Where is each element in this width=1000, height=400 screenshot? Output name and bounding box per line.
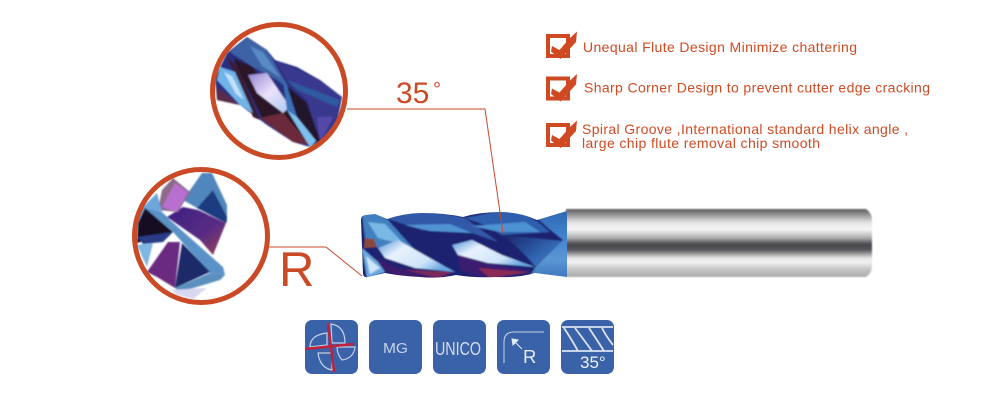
icon: MG: MG xyxy=(383,340,408,357)
feature 3: spiral groove xyxy=(548,120,908,151)
text: Unequal Flute Design Minimize chattering xyxy=(583,39,857,55)
icon: 35 degree helix: 35° xyxy=(580,353,606,372)
label: degree sign: ° xyxy=(433,79,441,101)
icon row: tool properties xyxy=(305,320,614,374)
text line 2: large chip flute removal chip smooth xyxy=(582,135,820,151)
zoom circle: flute detail xyxy=(212,24,346,158)
icon: 35 degree helix xyxy=(561,320,614,374)
fluted section xyxy=(361,211,567,278)
callout line: R corner xyxy=(269,247,362,276)
label: 35 degrees: 35 xyxy=(396,77,429,110)
label: R: R xyxy=(279,243,314,297)
feature 2: sharp corner xyxy=(548,74,930,102)
icon: four flute cross xyxy=(305,320,358,374)
icon: check box xyxy=(548,120,577,148)
zoom circle: corner detail xyxy=(134,170,268,302)
shank xyxy=(566,209,872,277)
feature 1: unequal flute xyxy=(548,32,857,59)
callout line: 35 degree helix xyxy=(347,109,503,233)
icon: UNICO: UNICO xyxy=(435,339,481,359)
icon: MG xyxy=(369,320,422,374)
icon: check box xyxy=(548,32,577,59)
icon: corner radius: R xyxy=(523,346,536,367)
icon: corner radius xyxy=(497,320,550,374)
icon: UNICO xyxy=(433,320,486,374)
text line 1: Spiral Groove ,International standard helix angle , xyxy=(582,121,908,137)
text: Sharp Corner Design to prevent cutter edge cracking xyxy=(584,80,930,96)
end mill tool xyxy=(358,208,872,282)
icon: check box xyxy=(548,74,577,102)
